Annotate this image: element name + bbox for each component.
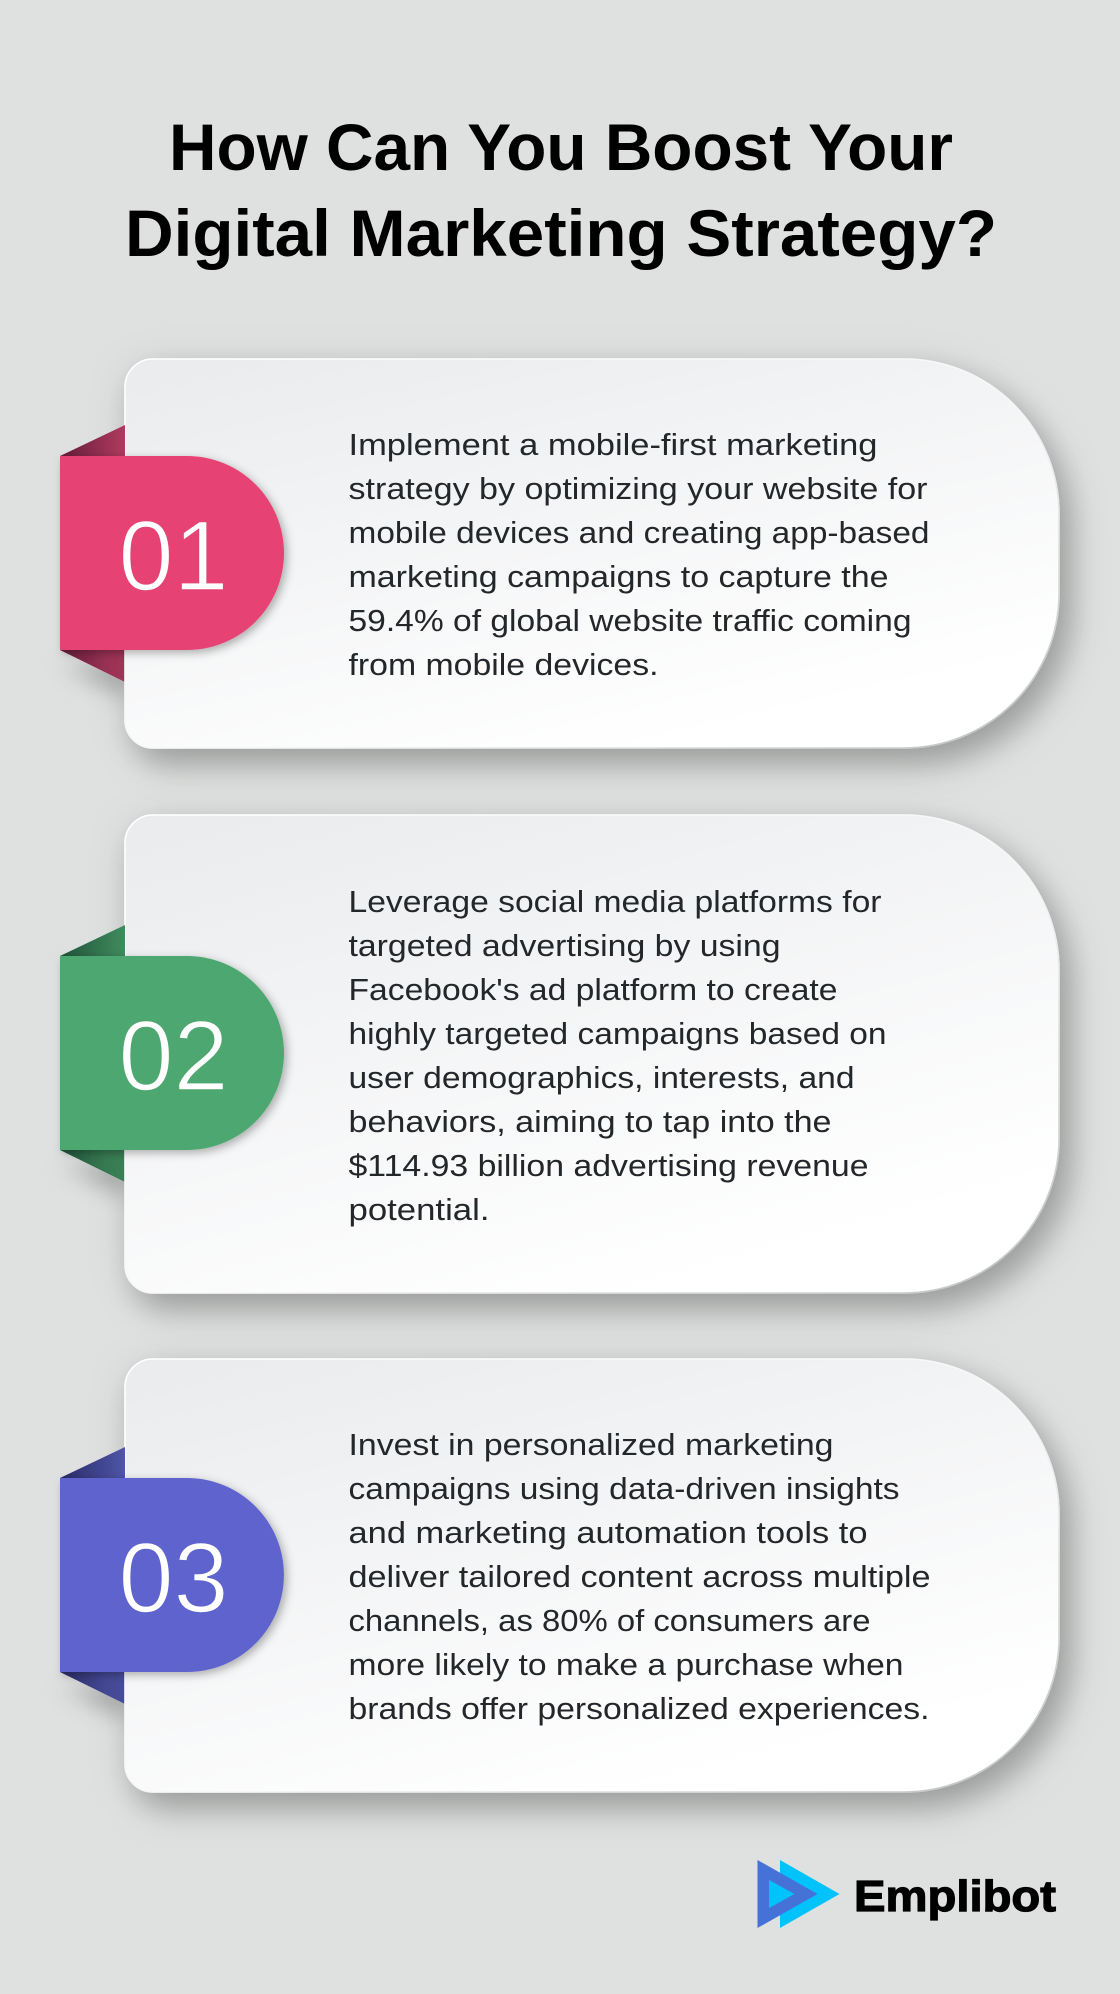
text: step 03: and marketing automation tools to — [348, 1516, 868, 1550]
title — [125, 110, 997, 270]
badge: 01 — [60, 456, 284, 650]
text: step 03: brands offer personalized experiences. — [348, 1692, 930, 1726]
text: step 02: targeted advertising by using — [348, 929, 780, 963]
panel: step 02 — [60, 815, 1059, 1293]
title: How Can You Boost Your — [169, 110, 953, 184]
card: step 03 — [125, 1359, 1059, 1792]
text: step 02: Facebook's ad platform to create — [348, 973, 838, 1007]
badge: 02 — [60, 956, 284, 1150]
text: step 02: potential. — [348, 1193, 490, 1227]
ribbon fold: step 01 top — [60, 425, 125, 456]
text: step 02: $114.93 billion advertising revenue — [348, 1149, 868, 1183]
badge: 02: 02 — [118, 1000, 229, 1111]
title: Digital Marketing Strategy? — [125, 196, 997, 270]
wordmark: Emplibot — [854, 1872, 1056, 1921]
text: step 02: Leverage social media platforms for — [348, 885, 882, 919]
text: step 03: channels, as 80% of consumers are — [348, 1604, 870, 1638]
text: step 02 — [348, 885, 886, 1227]
logo: Emplibot — [758, 1860, 1056, 1928]
badge: 03 — [60, 1478, 284, 1672]
text: step 01 — [348, 428, 930, 682]
panel: step 03 — [60, 1359, 1059, 1792]
text: step 02: behaviors, aiming to tap into the — [348, 1105, 832, 1139]
text: step 02: user demographics, interests, and — [348, 1061, 854, 1095]
text: step 01: strategy by optimizing your website for — [348, 472, 928, 506]
ribbon fold: step 03 bottom — [60, 1672, 125, 1704]
text: step 03: more likely to make a purchase when — [348, 1648, 904, 1682]
text: step 01: marketing campaigns to capture the — [348, 560, 888, 594]
text: step 03 — [348, 1428, 930, 1726]
badge: 01: 01 — [118, 500, 229, 611]
text: step 03: deliver tailored content across multiple — [348, 1560, 930, 1594]
ribbon fold: step 02 top — [60, 925, 125, 956]
text: step 01: 59.4% of global website traffic coming — [348, 604, 912, 638]
ribbon fold: step 01 bottom — [60, 650, 125, 682]
panel: step 01 — [60, 359, 1059, 748]
text: step 01: from mobile devices. — [348, 648, 658, 682]
ribbon fold: step 02 bottom — [60, 1150, 125, 1182]
text: step 03: Invest in personalized marketing — [348, 1428, 834, 1462]
badge: 03: 03 — [118, 1522, 229, 1633]
card: step 02 — [125, 815, 1059, 1293]
card: step 01 — [125, 359, 1059, 748]
text: step 01: mobile devices and creating app-based — [348, 516, 930, 550]
text: step 01: Implement a mobile-first marketing — [348, 428, 878, 462]
icon: play triangles — [758, 1860, 840, 1928]
ribbon fold: step 03 top — [60, 1447, 125, 1478]
text: step 02: highly targeted campaigns based on — [348, 1017, 886, 1051]
text: step 03: campaigns using data-driven insights — [348, 1472, 900, 1506]
